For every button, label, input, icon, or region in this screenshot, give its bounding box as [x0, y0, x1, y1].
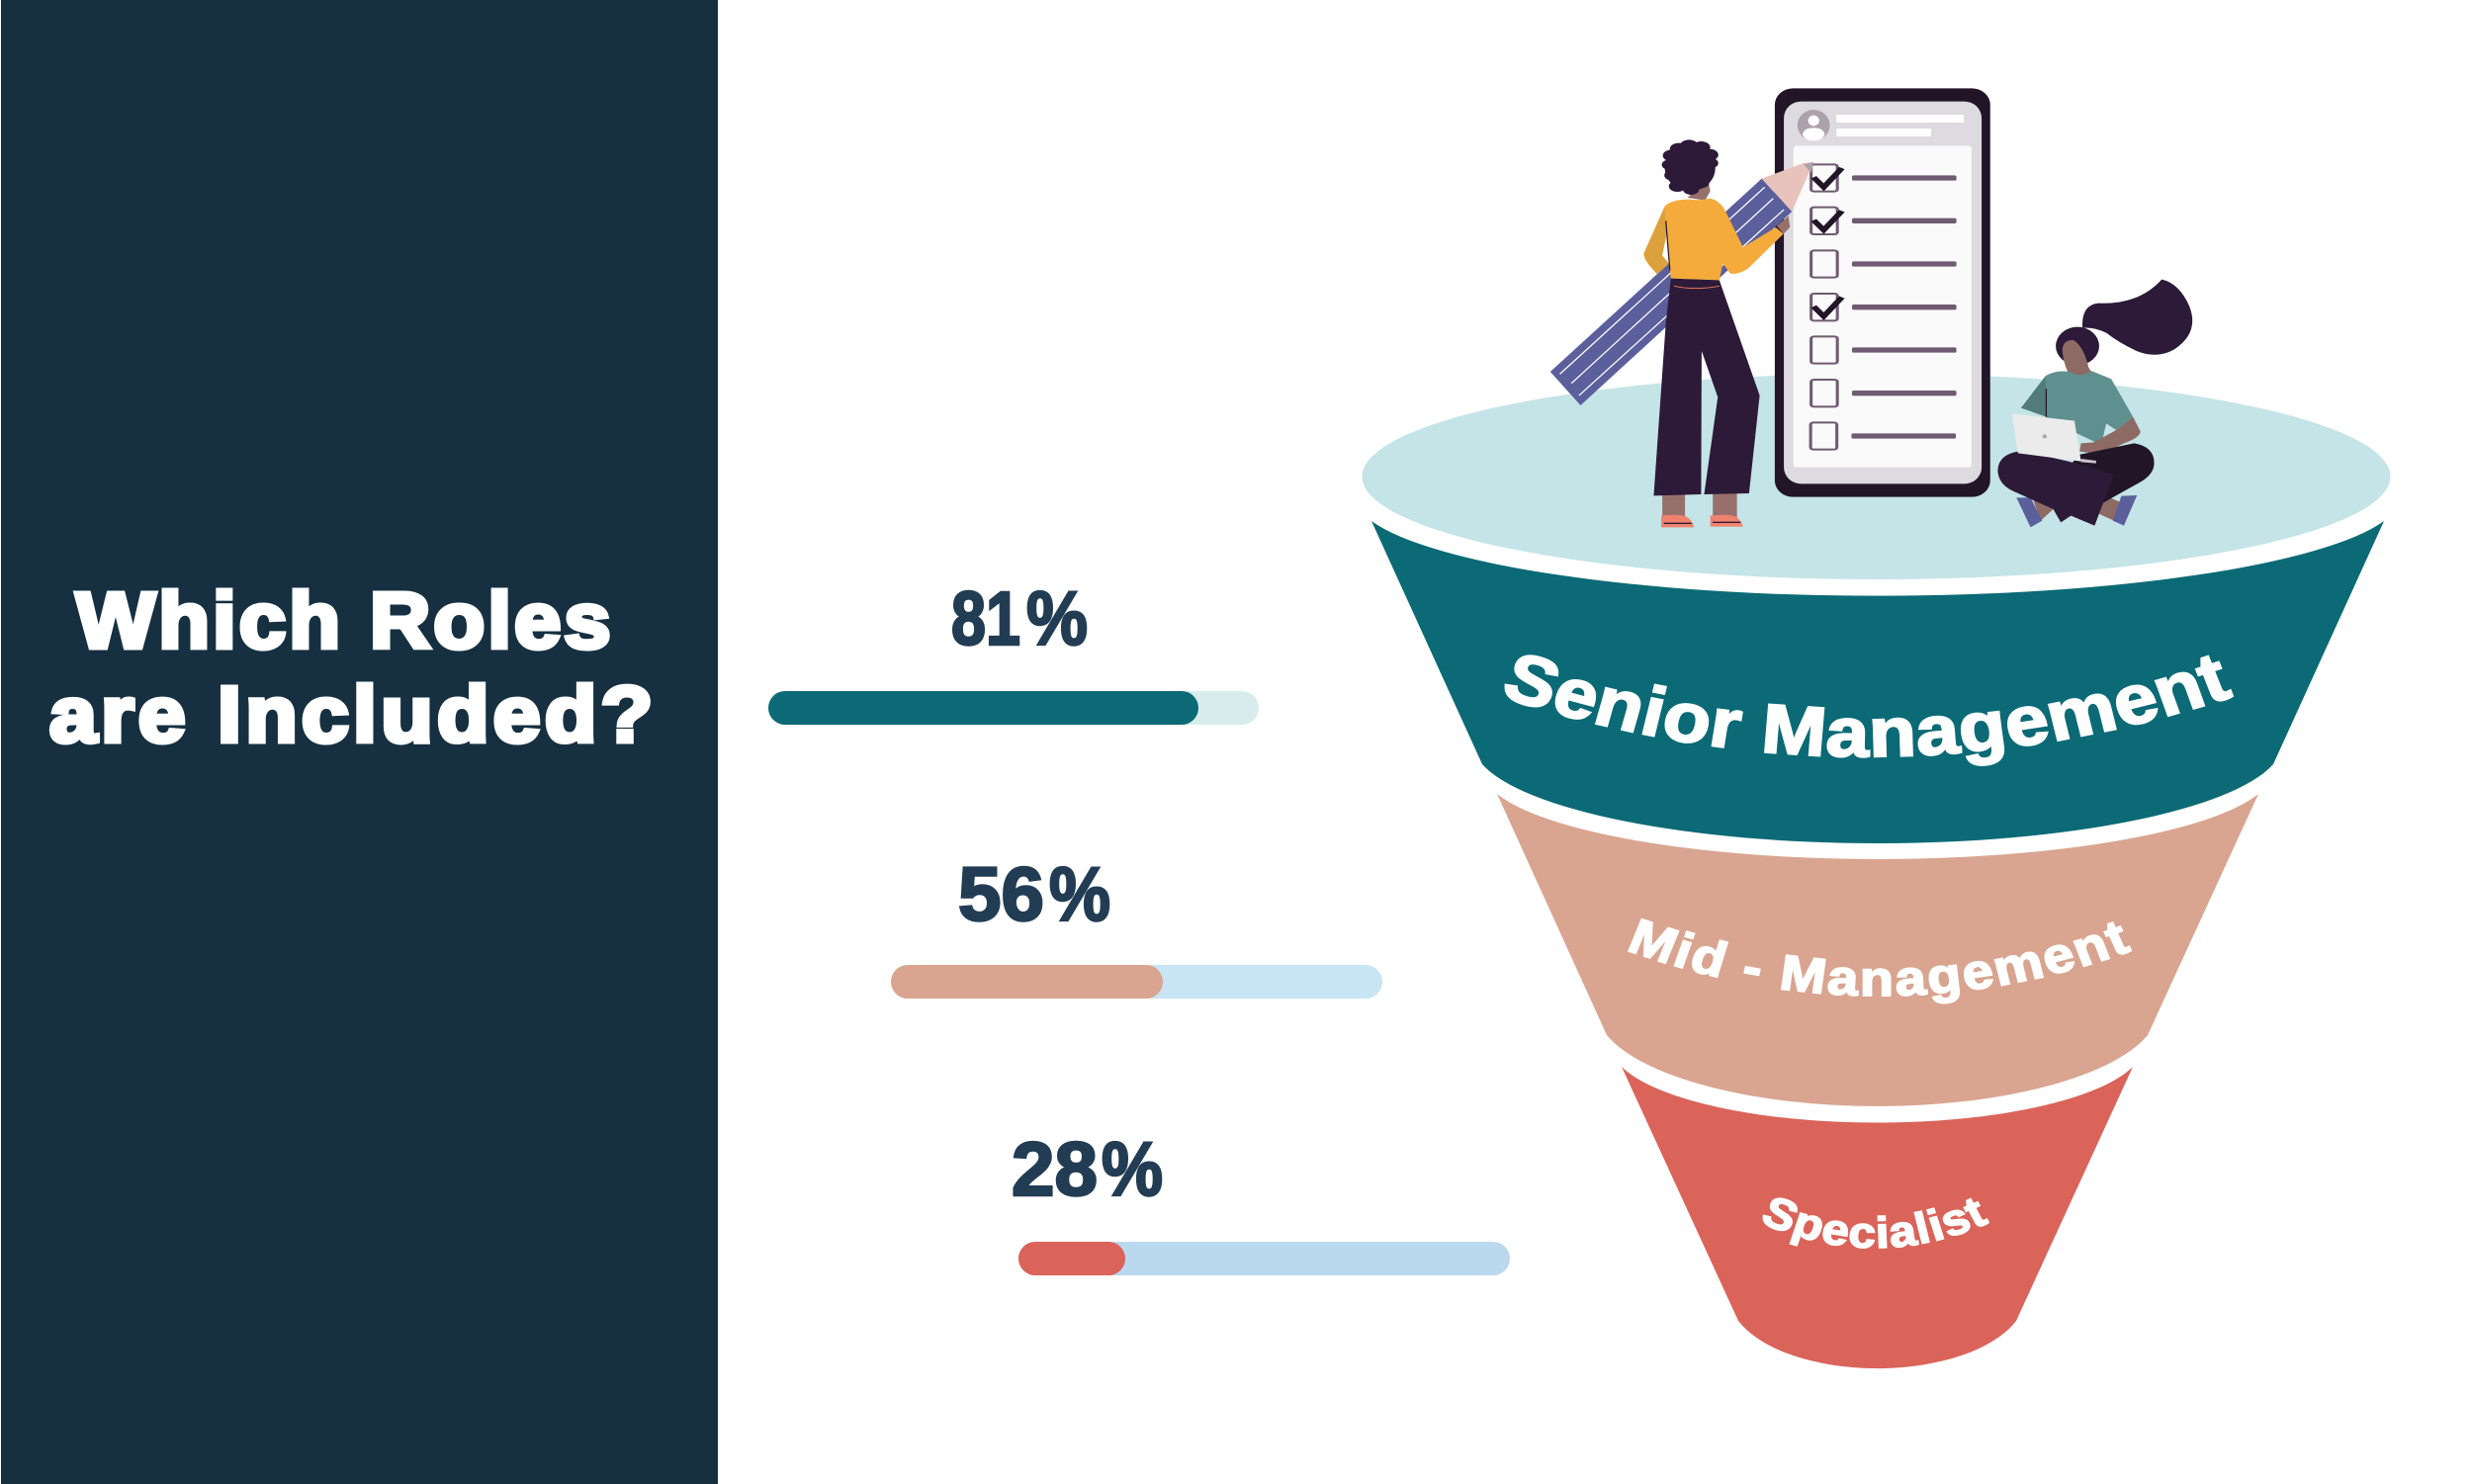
funnel tier: senior management: Senior Management	[1505, 655, 2235, 766]
title: are Included?	[49, 670, 657, 758]
funnel tier: mid-management	[1497, 794, 2258, 1106]
bar: senior management 81%: %	[1026, 576, 1088, 661]
icon: seated woman with laptop	[1997, 280, 2192, 527]
icon: standing woman	[1643, 139, 1790, 527]
funnel tier: specialist	[1622, 1067, 2133, 1368]
title: Which Roles	[76, 576, 614, 664]
bar: mid-management 56%: 56	[958, 852, 1044, 937]
funnel tier: mid-management: Mid - Management	[1628, 917, 2132, 1004]
bar: mid-management 56%	[891, 852, 1382, 999]
panel: title sidebar	[1, 0, 718, 1484]
icon: phone checklist	[1775, 88, 1990, 497]
icon: giant pencil	[1550, 162, 1813, 405]
illustration: checklist with two people	[1550, 88, 2192, 527]
funnel top disc	[1363, 374, 2391, 579]
bar: mid-management 56%: %	[1049, 852, 1110, 937]
bar: senior management 81%	[768, 576, 1259, 725]
funnel tier: senior management	[1371, 521, 2384, 843]
bar: specialist 28%: %	[1102, 1127, 1163, 1212]
funnel tier: specialist: Specialist	[1762, 1197, 1989, 1249]
title	[49, 576, 657, 758]
bar: specialist 28%	[1012, 1127, 1510, 1275]
funnel	[1363, 334, 2391, 1368]
bar: specialist 28%: 28	[1012, 1127, 1098, 1212]
bar chart: role percentages	[768, 576, 1510, 1275]
bar: senior management 81%: 81	[951, 576, 1020, 661]
